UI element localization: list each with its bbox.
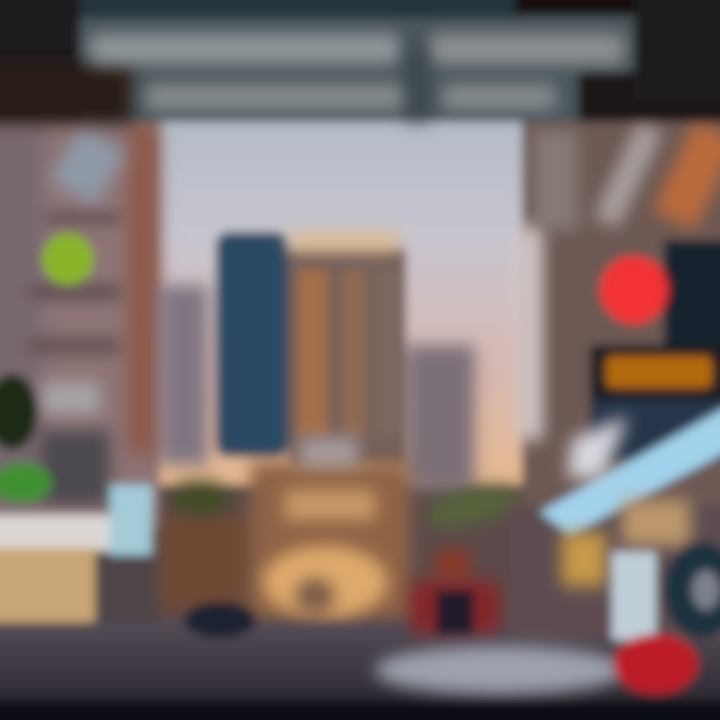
white car <box>375 646 625 694</box>
lower-left shopfront <box>0 485 160 625</box>
right shopfronts and blue awning <box>510 405 720 640</box>
green shopfront sign <box>0 463 52 503</box>
trees <box>170 476 523 536</box>
base lower street tone <box>0 470 720 640</box>
left building <box>0 110 208 530</box>
red car detail <box>614 634 698 694</box>
icon: green signal light <box>42 233 94 285</box>
lower-left tree <box>0 374 38 450</box>
title: illegible blurred heading <box>90 34 624 122</box>
icon: red signal light <box>600 256 668 324</box>
bottom edge <box>0 700 720 720</box>
road <box>0 622 720 720</box>
orange sign <box>606 356 712 388</box>
right building <box>518 120 720 520</box>
central buildings <box>216 232 475 490</box>
top banner background <box>0 0 720 124</box>
central arched entrance <box>160 438 410 618</box>
red vehicle <box>410 550 500 635</box>
dark car <box>184 602 256 638</box>
sky <box>130 110 550 485</box>
